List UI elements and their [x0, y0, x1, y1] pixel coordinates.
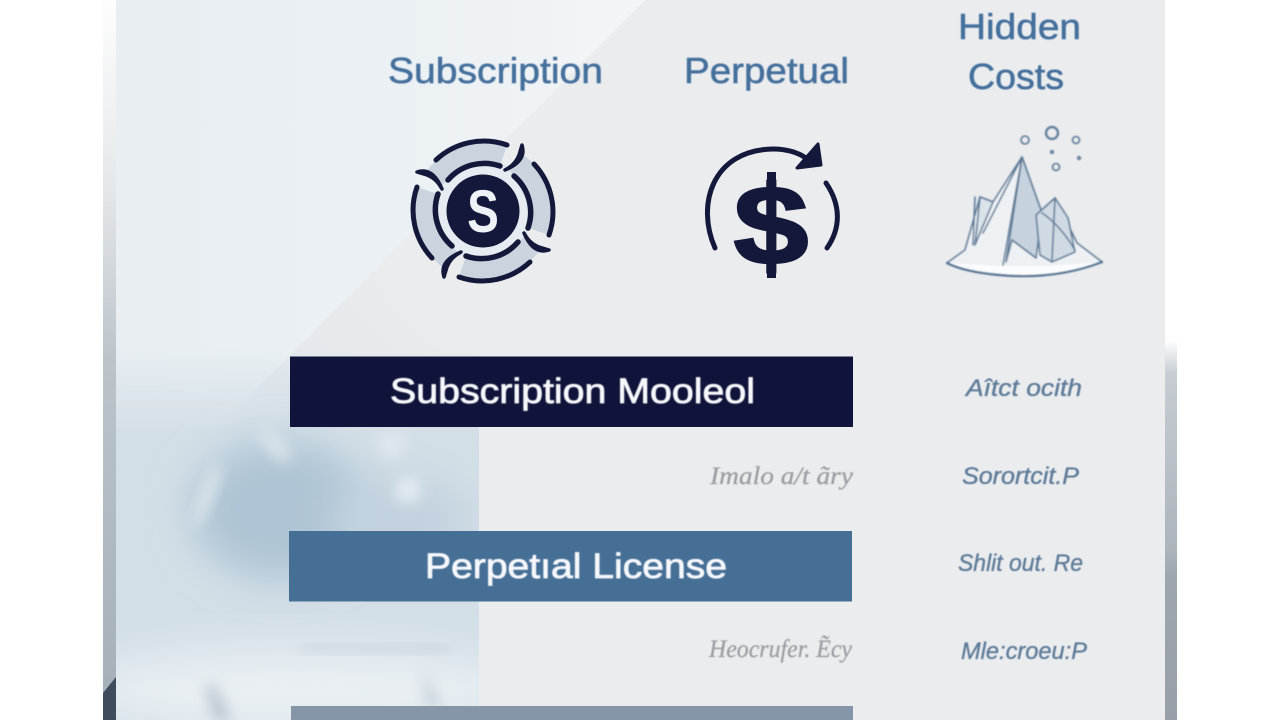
- label: right column two: Sorortcit.P: [962, 463, 1079, 490]
- bar: third row, cropped: [291, 706, 853, 720]
- bar: Subscription Model: Subscription Mooleol: [390, 372, 755, 411]
- bar: Perpetual License: [289, 531, 852, 602]
- label: row one middle: Imalo a/t ãry: [709, 463, 854, 490]
- bar: Perpetual License: Perpetıal License: [425, 547, 727, 586]
- bar: Subscription Model: [290, 356, 853, 427]
- label: right column three: Shlit out. Re: [958, 550, 1083, 577]
- icon: subscription cycle with dollar coin: [413, 141, 553, 281]
- icon: subscription cycle with dollar coin: S: [467, 178, 499, 245]
- heading: Hidden Costs: [958, 6, 1081, 97]
- left edge strip: [103, 0, 116, 720]
- label: right column four: Mle:croeu:P: [961, 638, 1087, 665]
- heading: Perpetual: Perpetual: [684, 50, 849, 91]
- icon: iceberg with bubbles: [947, 127, 1102, 276]
- icon: perpetual dollar with arrow: $: [734, 164, 808, 288]
- right edge strip: [1165, 340, 1177, 720]
- heading: Subscription: Subscription: [388, 50, 603, 91]
- heading: Hidden Costs: Hidden: [958, 6, 1081, 47]
- label: right column one: Aîtct ocith: [964, 375, 1082, 402]
- heading: Hidden Costs: Costs: [968, 56, 1064, 97]
- icon: perpetual dollar with arrow: [707, 144, 837, 288]
- label: row two middle: Heocrufer. Ẽcy: [708, 635, 853, 663]
